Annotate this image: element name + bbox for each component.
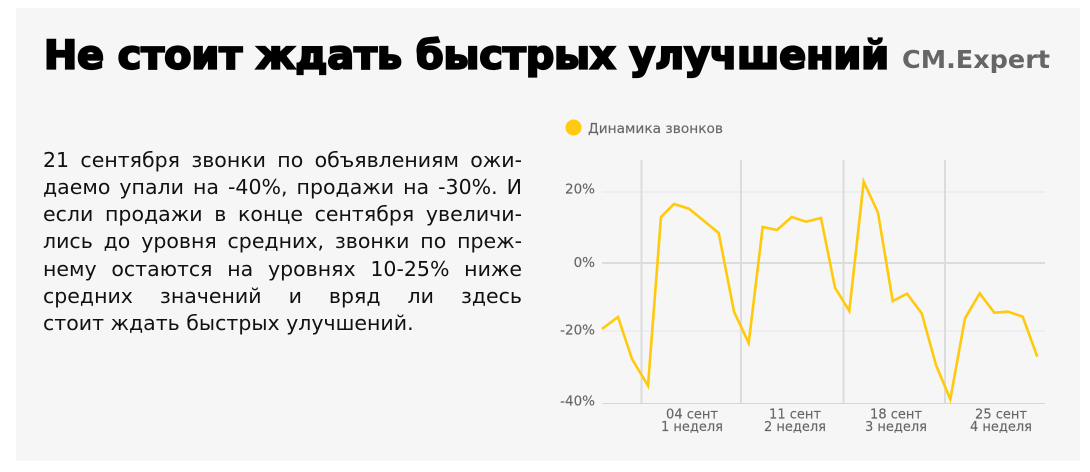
x axis labels: 04 сент [666, 408, 718, 422]
text block: стоит ждать быстрых улучшений. [43, 311, 414, 335]
x axis labels: 11 сент [769, 408, 821, 422]
y axis labels: 20% [565, 182, 595, 198]
text block: средних значений и вряд ли здесь [43, 284, 522, 308]
y axis labels: 0% [574, 255, 595, 271]
text block [43, 148, 522, 335]
x axis labels: 4 неделя [970, 420, 1032, 435]
text block: если продажи в конце сентября увеличи- [43, 202, 522, 226]
brand label: CM.Expert [902, 45, 1050, 74]
text block: 21 сентября звонки по объявлениям ожи- [43, 148, 522, 172]
y axis labels: -20% [560, 322, 595, 338]
x axis labels: 18 сент [870, 408, 922, 422]
x axis labels: 2 неделя [764, 420, 826, 435]
x axis labels: 3 неделя [865, 420, 927, 435]
x axis labels: 1 неделя [661, 420, 723, 435]
chart legend: Динамика звонков [588, 122, 723, 137]
text block: нему остаются на уровнях 10-25% ниже [43, 257, 522, 281]
x axis labels [661, 408, 1032, 435]
title: Не стоит ждать быстрых улучшений [44, 34, 889, 78]
x axis labels: 25 сент [975, 408, 1027, 422]
data line: call dynamics [602, 182, 1037, 399]
text block: лись до уровня средних, звонки по преж- [43, 229, 522, 253]
chart legend [566, 120, 723, 137]
y axis labels [560, 182, 595, 410]
text block: даемо упали на -40%, продажи на -30%. И [43, 175, 522, 199]
y axis labels: -40% [560, 394, 595, 410]
